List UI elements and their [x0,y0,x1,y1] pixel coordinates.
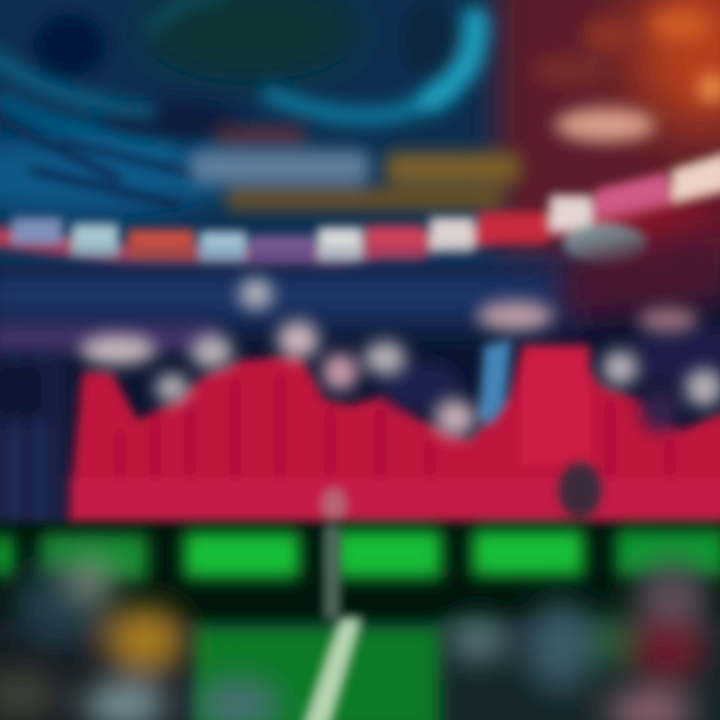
green led boards [0,530,720,580]
red and orange glowing lights [530,9,720,142]
players left group [0,558,280,720]
pitch [190,525,500,720]
panel: blue seating band [0,220,720,535]
players right group [450,562,710,720]
bar chart: red skyline columns [68,345,720,524]
panel: dark foreground crowd [0,620,720,720]
white data point markers [80,278,720,437]
teal ring of lights [0,0,475,150]
blurred headline text [190,128,520,210]
blue vertical bar [478,340,512,425]
panel: stadium roof background [0,0,720,270]
banner ribbon [0,152,720,266]
dark referee silhouette [321,462,602,523]
dark navy shapes over red [0,325,720,432]
panel: dark lower band [0,522,720,622]
